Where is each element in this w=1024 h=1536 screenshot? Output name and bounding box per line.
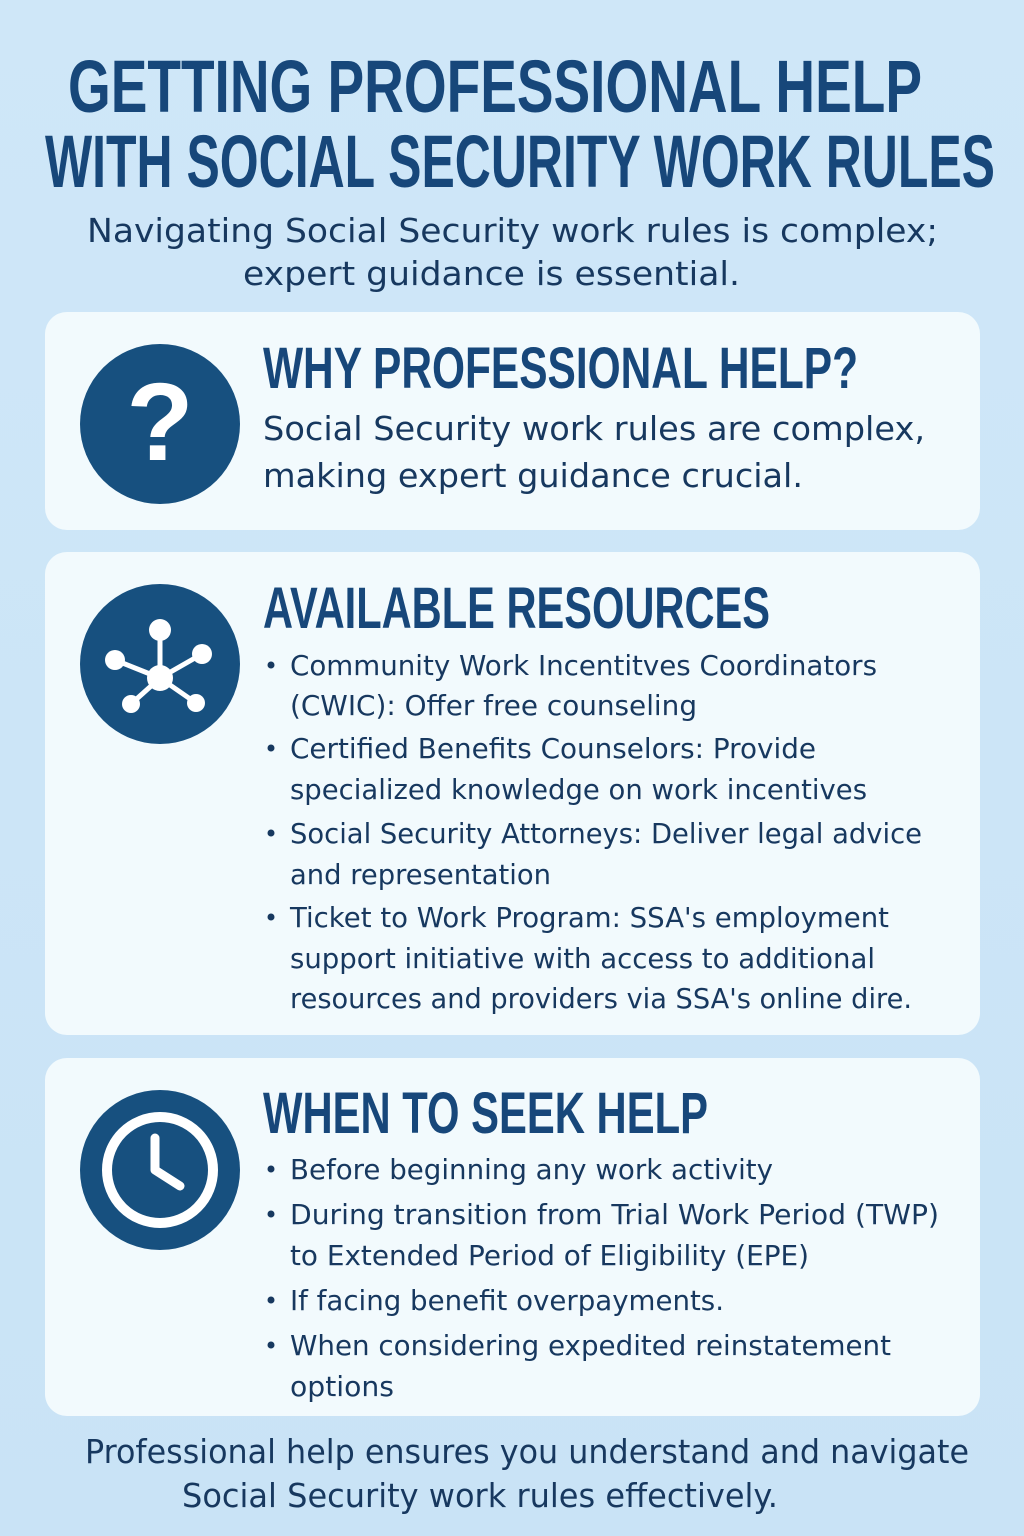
panel: why professional help	[45, 312, 980, 530]
heading: when to seek help: WHEN TO SEEK HELP	[263, 1081, 708, 1146]
text: why body: making expert guidance crucial.	[263, 456, 803, 495]
list: when	[268, 1153, 939, 1403]
icon: clock	[80, 1090, 240, 1250]
icon: question mark: ?	[126, 361, 194, 484]
subtitle	[87, 211, 938, 293]
list: resources: (CWIC): Offer free counseling	[290, 689, 697, 722]
heading: available resources: AVAILABLE RESOURCES	[263, 576, 770, 641]
footer text	[85, 1432, 969, 1515]
list: when: to Extended Period of Eligibility (EPE)	[290, 1239, 809, 1272]
subtitle: expert guidance is essential.	[243, 254, 740, 293]
list: resources: support initiative with access to additional	[290, 942, 875, 975]
text: why body	[263, 409, 925, 495]
list: resources: Ticket to Work Program: SSA's employment	[289, 901, 889, 934]
list: resources: resources and providers via SSA's online dire.	[290, 982, 912, 1015]
title	[45, 45, 995, 203]
list: when: During transition from Trial Work Period (TWP)	[290, 1198, 939, 1231]
list: resources: and representation	[290, 858, 551, 891]
panel: when to seek help	[45, 1058, 980, 1416]
footer text: Social Security work rules effectively.	[182, 1476, 778, 1515]
list: resources: Certified Benefits Counselors: Provide	[290, 732, 816, 765]
icon: question mark	[80, 344, 240, 504]
list: when: If facing benefit overpayments.	[290, 1284, 724, 1317]
list: resources: specialized knowledge on work incentives	[290, 773, 867, 806]
list: when: When considering expedited reinstatement	[290, 1329, 891, 1362]
subtitle: Navigating Social Security work rules is complex;	[87, 211, 938, 250]
list: resources: Community Work Incentitves Coordinators	[290, 649, 877, 682]
list: resources: Social Security Attorneys: Deliver legal advice	[290, 817, 922, 850]
list: when: Before beginning any work activity	[290, 1153, 773, 1186]
text: why body: Social Security work rules are complex,	[263, 409, 925, 448]
panel: available resources	[45, 552, 980, 1035]
footer text: Professional help ensures you understand and navigate	[85, 1432, 969, 1471]
icon: network	[80, 584, 240, 744]
list: resources	[268, 649, 922, 1015]
list: when: options	[290, 1370, 394, 1403]
